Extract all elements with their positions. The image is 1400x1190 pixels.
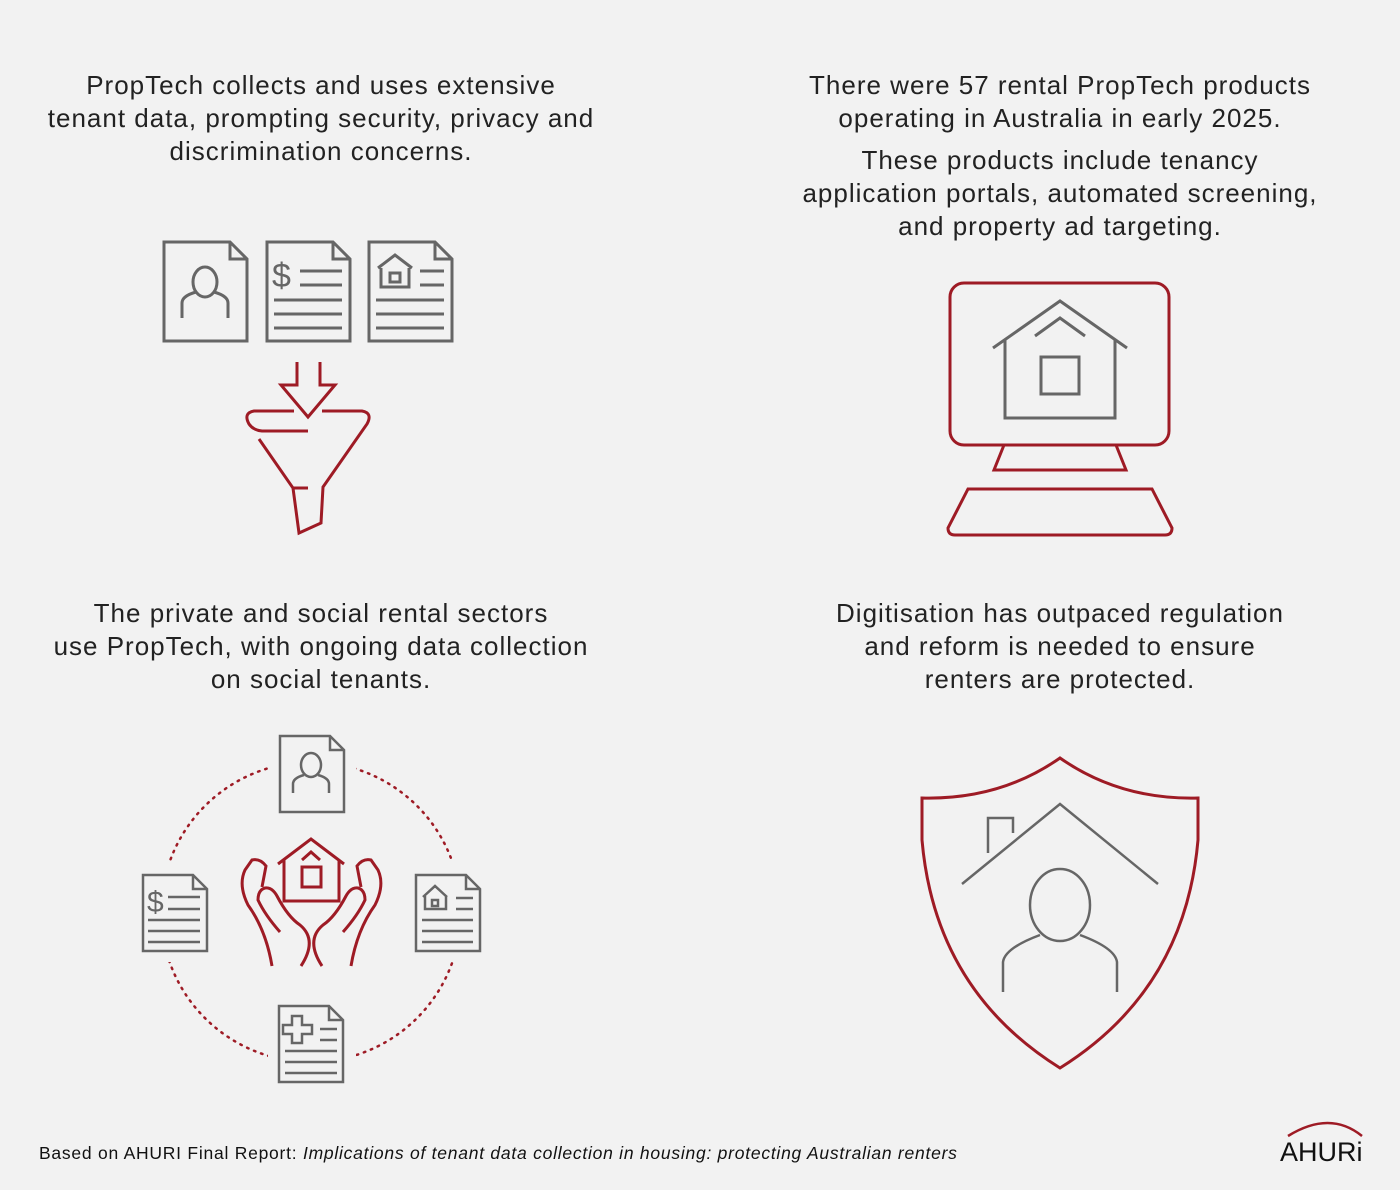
text: bottom-left: use PropTech, with ongoing data collection [54, 631, 588, 661]
text: top-right: operating in Australia in early 2025. [838, 103, 1282, 133]
logo [1280, 1123, 1363, 1167]
icon: documents top [164, 242, 452, 341]
text: top-right: There were 57 rental PropTech products [809, 70, 1311, 100]
text: bottom-right: Digitisation has outpaced regulation [836, 598, 1284, 628]
logo: AHURi [1280, 1137, 1363, 1167]
icon: computer [948, 283, 1172, 535]
icon: hands with documents circle: $ [147, 886, 164, 919]
text: top-right: and property ad targeting. [898, 211, 1222, 241]
text: bottom-right [836, 598, 1284, 694]
icon: funnel [247, 362, 369, 533]
text: bottom-left: on social tenants. [211, 664, 431, 694]
text: bottom-left: The private and social rental sectors [94, 598, 548, 628]
text: bottom-right: and reform is needed to ensure [864, 631, 1256, 661]
footer source: Based on AHURI Final Report: Implications of tenant data collection in housing: protecting Australian renters [39, 1143, 958, 1163]
icon: shield [922, 758, 1198, 1068]
text: top-left [48, 70, 594, 166]
text: top-right: application portals, automated screening, [802, 178, 1318, 208]
text: bottom-right: renters are protected. [925, 664, 1195, 694]
text: top-right [802, 70, 1318, 241]
text: top-left: PropTech collects and uses extensive [86, 70, 556, 100]
text: bottom-left [54, 598, 588, 694]
icon: documents top: $ [272, 257, 291, 295]
icon: hands with documents circle [130, 725, 495, 1090]
text: top-left: tenant data, prompting security, privacy and [48, 103, 594, 133]
text: top-right: These products include tenancy [861, 145, 1259, 175]
text: top-left: discrimination concerns. [170, 136, 472, 166]
